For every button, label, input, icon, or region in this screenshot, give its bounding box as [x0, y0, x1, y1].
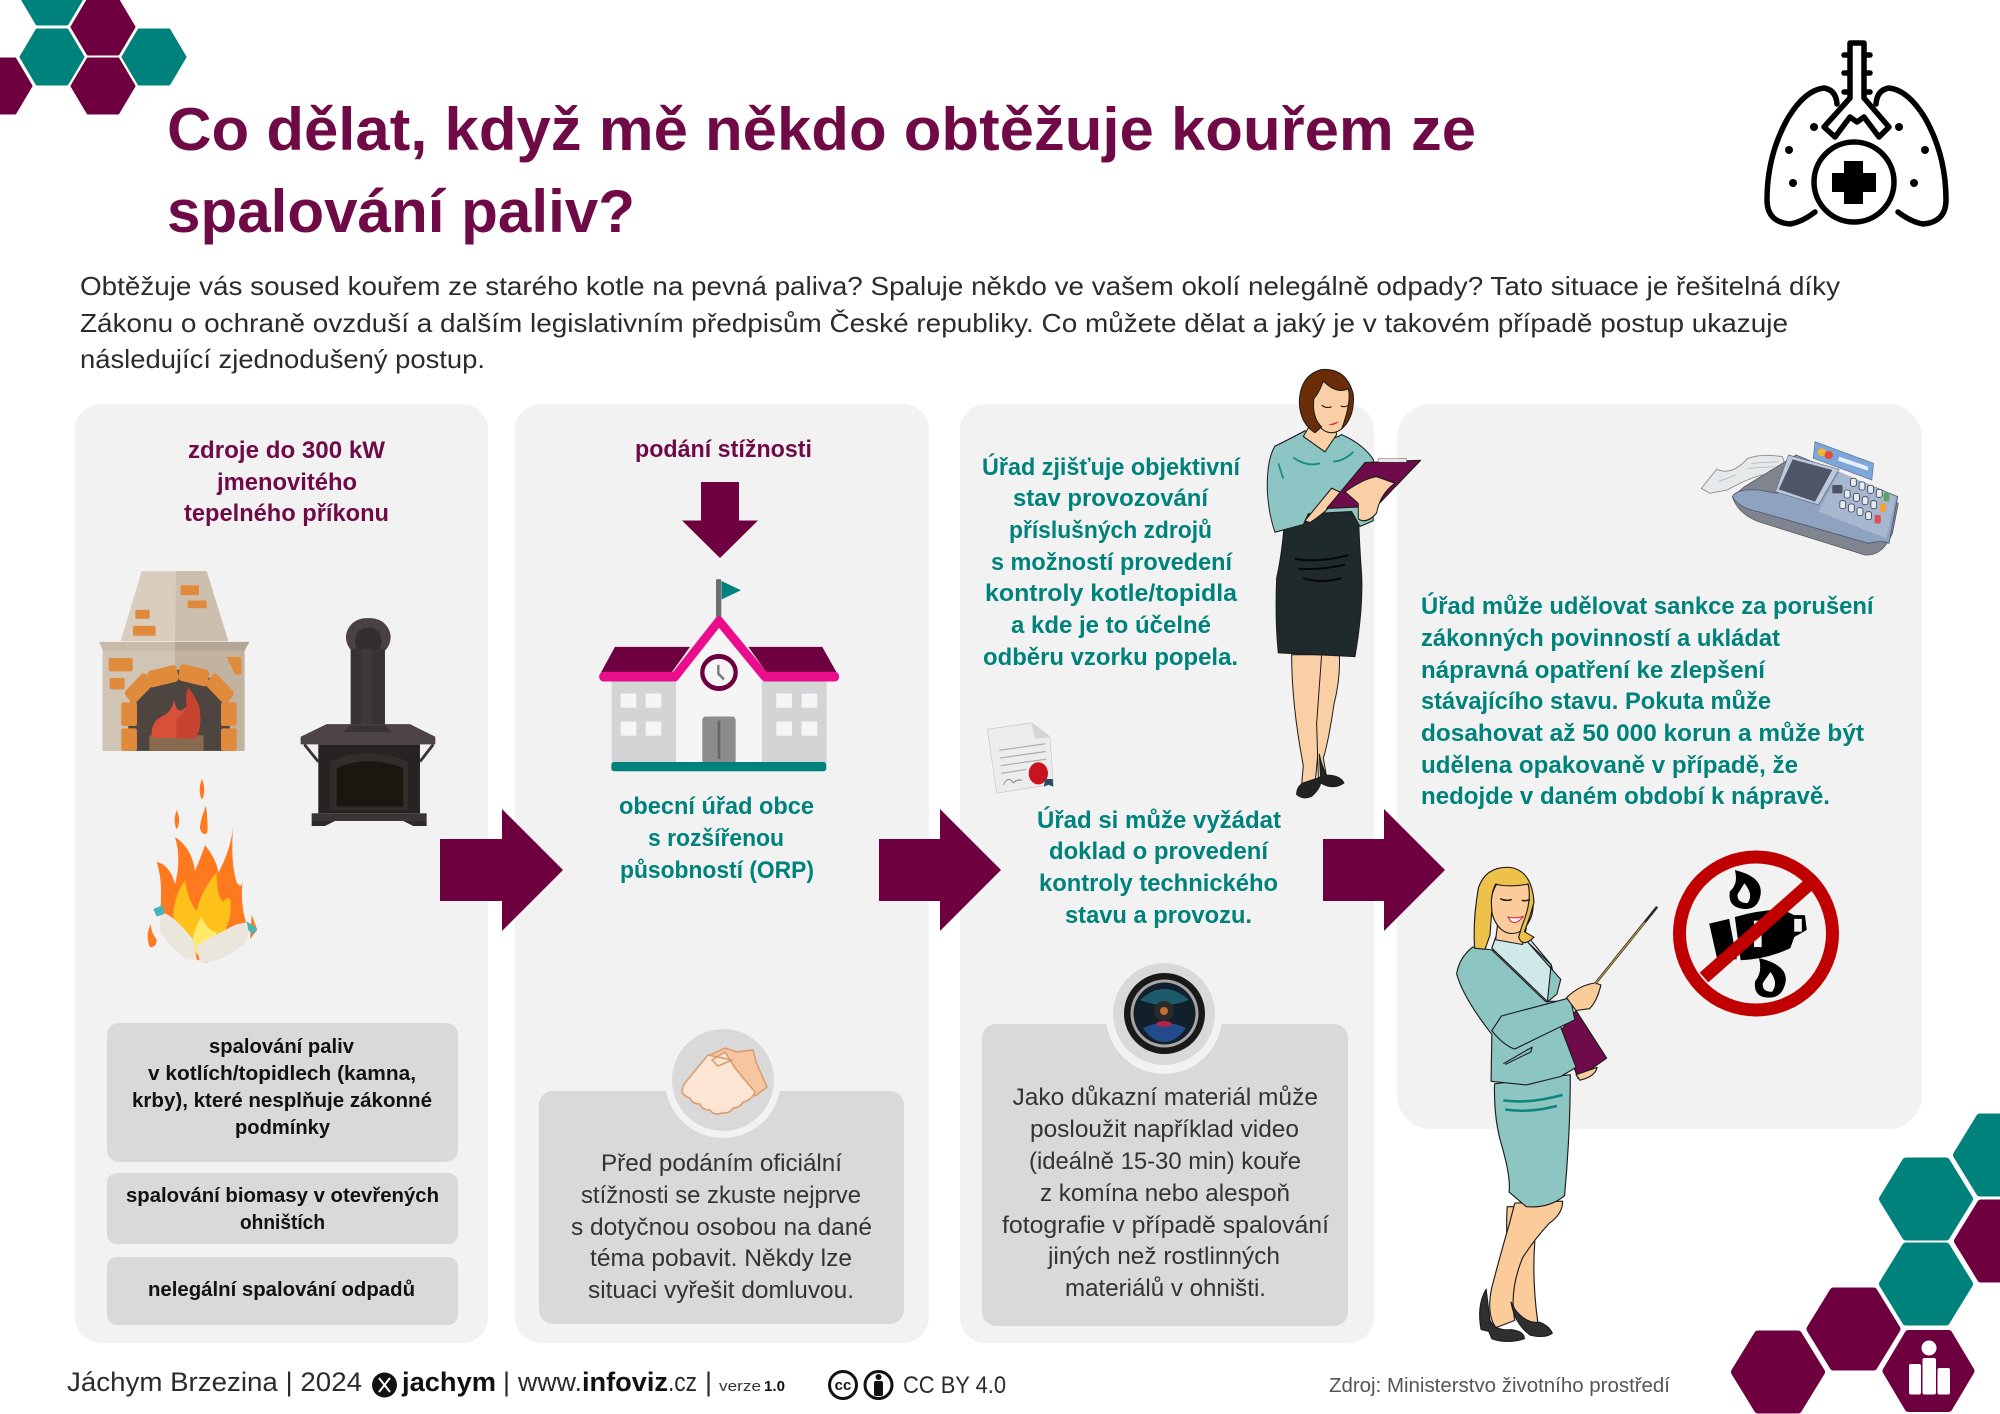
icon: camera lens	[1106, 958, 1222, 1074]
callout: talk first: Před podáním oficiální	[601, 1150, 842, 1177]
icon: infoviz logo hexagon	[1886, 1334, 1970, 1408]
text: sanctions: zákonných povinností a ukládat	[1421, 625, 1780, 652]
text: office checks: a kde je to účelné	[1011, 612, 1211, 639]
footer: author and links: Jáchym Brzezina | 2024	[67, 1367, 362, 1397]
arrow: step 1 to 2	[440, 809, 563, 931]
panel: complaint	[515, 404, 929, 1343]
text: sanctions: stávajícího stavu. Pokuta může	[1421, 688, 1771, 715]
callout: boilers: v kotlích/topidlech (kamna,	[148, 1063, 416, 1085]
callout: boilers: spalování paliv	[209, 1036, 355, 1058]
callout: biomass: spalování biomasy v otevřených	[126, 1185, 439, 1207]
label: municipal office: s rozšířenou	[648, 825, 784, 852]
callout: talk first: stížnosti se zkuste nejprve	[581, 1182, 861, 1209]
footer: author and links: |	[503, 1367, 510, 1397]
icon: creative commons license	[830, 1372, 1006, 1399]
footer: author and links: verze	[719, 1378, 761, 1395]
panel: sanctions	[1397, 404, 1922, 1129]
arrow: down	[682, 482, 758, 558]
icon: payment terminal	[1701, 442, 1898, 555]
icon: X logo	[372, 1372, 397, 1398]
panel: office findings	[960, 404, 1374, 1343]
text: sanctions: nedojde v daném období k nápravě.	[1421, 783, 1830, 810]
callout: evidence	[982, 1024, 1348, 1326]
icon: lungs with medical cross	[1767, 43, 1946, 224]
callout: boilers: krby), které nesplňuje zákonné	[132, 1090, 432, 1112]
callout: illegal waste	[107, 1257, 458, 1325]
text: sanctions: nápravná opatření ke zlepšení	[1421, 657, 1766, 684]
text: sanctions: Úřad může udělovat sankce za porušení	[1421, 592, 1875, 620]
callout: talk first: s dotyčnou osobou na dané	[571, 1214, 872, 1241]
callout: evidence: z komína nebo alespoň	[1040, 1180, 1290, 1207]
callout: illegal waste: nelegální spalování odpadů	[148, 1279, 415, 1301]
icon: handshake	[665, 1022, 781, 1138]
text: office checks: příslušných zdrojů	[1009, 517, 1212, 544]
heading: sources: zdroje do 300 kW	[188, 437, 385, 464]
callout: evidence: Jako důkazní materiál může	[1012, 1084, 1318, 1111]
icon: creative commons license: CC BY 4.0	[903, 1372, 1006, 1399]
intro text: Zákonu o ochraně ovzduší a dalším legislativním předpisům České republiky. Co můžete dělat a jaký je v takovém případě postup ukazuje	[80, 308, 1788, 338]
text: office checks: s možností provedení	[991, 549, 1233, 576]
footer: author and links: infoviz	[582, 1367, 668, 1397]
illustration: woman with clipboard	[1267, 369, 1421, 798]
panel: sources	[75, 404, 488, 1343]
footer: author and links: jachym	[401, 1367, 496, 1397]
callout: evidence: jiných než rostlinných	[1047, 1243, 1280, 1270]
decoration: hexagons top left	[0, 0, 185, 113]
text: document request: kontroly technického	[1039, 870, 1278, 897]
text: office checks: stav provozování	[1013, 485, 1209, 512]
title: Co dělat, když mě někdo obtěžuje kouřem ze	[167, 96, 1476, 163]
callout: evidence: (ideálně 15-30 min) kouře	[1029, 1148, 1301, 1175]
footer: author and links: |	[705, 1367, 712, 1397]
text: office checks: Úřad zjišťuje objektivní	[982, 453, 1241, 481]
text: sanctions	[1421, 592, 1875, 810]
text: sanctions: udělena opakovaně v případě, že	[1421, 752, 1798, 779]
callout: boilers	[107, 1023, 458, 1162]
icon: creative commons license: cc	[835, 1377, 851, 1394]
callout: evidence: posloužit například video	[1030, 1116, 1299, 1143]
icon: municipal office building	[601, 579, 837, 771]
footer: author and links	[67, 1367, 785, 1398]
text: office checks: kontroly kotle/topidla	[985, 580, 1238, 607]
callout: evidence: fotografie v případě spalování	[1002, 1212, 1329, 1239]
callout: biomass: ohništích	[240, 1212, 325, 1234]
label: municipal office	[619, 793, 814, 884]
text: document request: doklad o provedení	[1049, 838, 1269, 865]
text: document request	[1037, 806, 1281, 929]
decoration: hexagons bottom right	[1735, 1118, 2000, 1410]
callout: boilers: podmínky	[235, 1117, 331, 1139]
heading: sources: jmenovitého	[216, 469, 357, 496]
text: document request: Úřad si může vyžádat	[1037, 806, 1281, 834]
intro text	[80, 271, 1840, 374]
source: Zdroj: Ministerstvo životního prostředí	[1329, 1375, 1670, 1397]
callout: talk first	[539, 1091, 904, 1324]
arrow: step 3 to 4	[1323, 809, 1445, 931]
intro text: následující zjednodušený postup.	[80, 344, 485, 374]
intro text: Obtěžuje vás soused kouřem ze starého kotle na pevná paliva? Spaluje někdo ve vašem okolí nelegálně odpady? Tato situace je řešitelná díky	[80, 271, 1840, 301]
callout: talk first: téma pobavit. Někdy lze	[590, 1245, 852, 1272]
text: office checks: odběru vzorku popela.	[983, 644, 1238, 671]
text: document request: stavu a provozu.	[1065, 902, 1252, 929]
title: spalování paliv?	[167, 178, 635, 245]
icon: wood stove	[301, 618, 435, 826]
heading: sources: tepelného příkonu	[184, 500, 389, 527]
heading: complaint: podání stížnosti	[635, 436, 812, 463]
text: sanctions: dosahovat až 50 000 korun a může být	[1421, 720, 1864, 747]
icon: fireplace	[99, 571, 249, 751]
callout: biomass	[107, 1173, 458, 1244]
label: municipal office: působností (ORP)	[620, 857, 814, 884]
footer: author and links: www.	[517, 1367, 582, 1397]
illustration: woman with pointer	[1457, 867, 1657, 1341]
icon: no burning bottles sign	[1680, 857, 1832, 1010]
title	[167, 96, 1476, 245]
icon: certificate	[987, 723, 1053, 793]
heading: sources	[184, 437, 389, 527]
footer: author and links: 1.0	[764, 1378, 785, 1395]
text: office checks	[982, 453, 1241, 671]
footer: author and links: .cz	[668, 1367, 697, 1397]
callout: talk first: situaci vyřešit domluvou.	[588, 1277, 854, 1304]
callout: evidence: materiálů v ohništi.	[1065, 1275, 1266, 1302]
label: municipal office: obecní úřad obce	[619, 793, 814, 820]
icon: burning plastic bottles	[148, 779, 257, 963]
arrow: step 2 to 3	[879, 809, 1001, 931]
